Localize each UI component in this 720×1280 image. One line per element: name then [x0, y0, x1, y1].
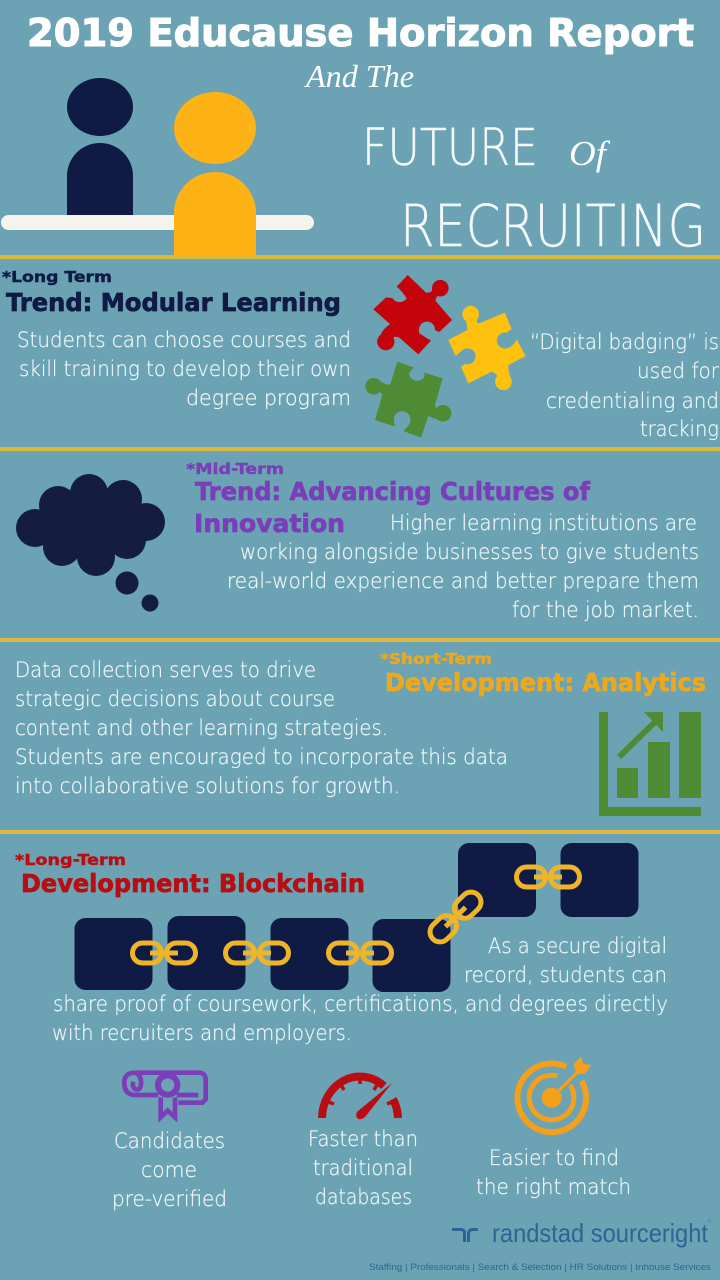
text: faster than traditional databases: Faster than [308, 1127, 418, 1151]
logo: randstad sourceright: ® [707, 1218, 712, 1225]
text: students can choose: skill training to develop their own [19, 357, 351, 381]
text: secure digital record: As a secure digital [488, 934, 667, 958]
icon: speedometer [322, 1076, 398, 1119]
icon: block chain [74, 843, 638, 992]
text: candidates come pre-verified: Candidates [114, 1129, 225, 1153]
text: easier to find the right match: the right match [476, 1175, 631, 1199]
text: students can choose [17, 328, 351, 410]
panel: analytics [15, 650, 706, 816]
text: students can choose: Students can choose courses and [17, 328, 351, 352]
label: long-term: *Long-Term [15, 851, 126, 869]
label: long term: *Long Term [2, 268, 112, 286]
text: data collection: into collaborative solutions for growth. [15, 774, 400, 798]
text: easier to find the right match: Easier to find [489, 1146, 619, 1170]
text: higher learning institutions: for the job market. [512, 598, 699, 622]
text: data collection: Students are encouraged to incorporate this data [15, 745, 508, 769]
text: data collection [15, 658, 508, 798]
heading: trend advancing cultures [194, 477, 591, 538]
text: secure digital record: share proof of coursework, certifications, and degrees directly [53, 992, 668, 1016]
text: candidates come pre-verified [112, 1129, 227, 1211]
icon: diploma with seal [124, 1073, 206, 1117]
text: faster than traditional databases: databases [315, 1185, 412, 1209]
text: faster than traditional databases: traditional [313, 1156, 413, 1180]
text: students can choose: degree program [186, 386, 351, 410]
tagline: Staffing | Professionals | Search & Selection | HR Solutions | Inhouse Services [369, 1262, 711, 1273]
label: mid-term: *Mid-Term [186, 460, 284, 478]
text: easier to find the right match [476, 1146, 631, 1199]
heading: development analytics: Development: Analytics [385, 668, 706, 697]
panel: advancing cultures of innovation [16, 460, 699, 622]
text: higher learning institutions: Higher learning institutions are [390, 511, 697, 535]
text: data collection: strategic decisions about course [15, 687, 335, 711]
text: higher learning institutions [227, 511, 699, 622]
title: 2019 Educause Horizon Report [27, 11, 694, 55]
heading: trend modular learning: Trend: Modular Learning [6, 288, 341, 317]
text: secure digital record: with recruiters and employers. [52, 1021, 352, 1045]
text: secure digital record [52, 934, 668, 1045]
heading: Of: Of [569, 134, 611, 173]
text: higher learning institutions: real-world experience and better prepare them [227, 569, 699, 593]
panel: modular learning [2, 268, 719, 441]
icon: bar chart with arrow [599, 712, 701, 816]
illustration: two people at a table [1, 78, 314, 256]
icon: puzzle pieces [365, 275, 526, 438]
text: higher learning institutions: working alongside businesses to give students [240, 540, 699, 564]
text: digital badging [530, 330, 719, 441]
text: candidates come pre-verified: pre-verified [112, 1187, 227, 1211]
text: secure digital record: record, students can [464, 963, 667, 987]
text: candidates come pre-verified: come [141, 1158, 197, 1182]
icon: target with arrow [517, 1057, 592, 1132]
panel: blockchain [15, 843, 668, 1211]
text: data collection: content and other learning strategies. [15, 716, 388, 740]
heading: trend advancing cultures: Innovation [194, 509, 345, 538]
text: data collection: Data collection serves to drive [15, 658, 316, 682]
icon: thought cloud [16, 474, 165, 612]
text: faster than traditional databases [308, 1127, 418, 1209]
heading: trend advancing cultures: Trend: Advancing Cultures of [195, 477, 591, 506]
heading: development blockchain: Development: Blockchain [21, 869, 365, 898]
subtitle: And The: And The [304, 58, 414, 94]
heading: FUTURE: FUTURE [362, 119, 538, 178]
label: short-term: *Short-Term [380, 650, 492, 668]
